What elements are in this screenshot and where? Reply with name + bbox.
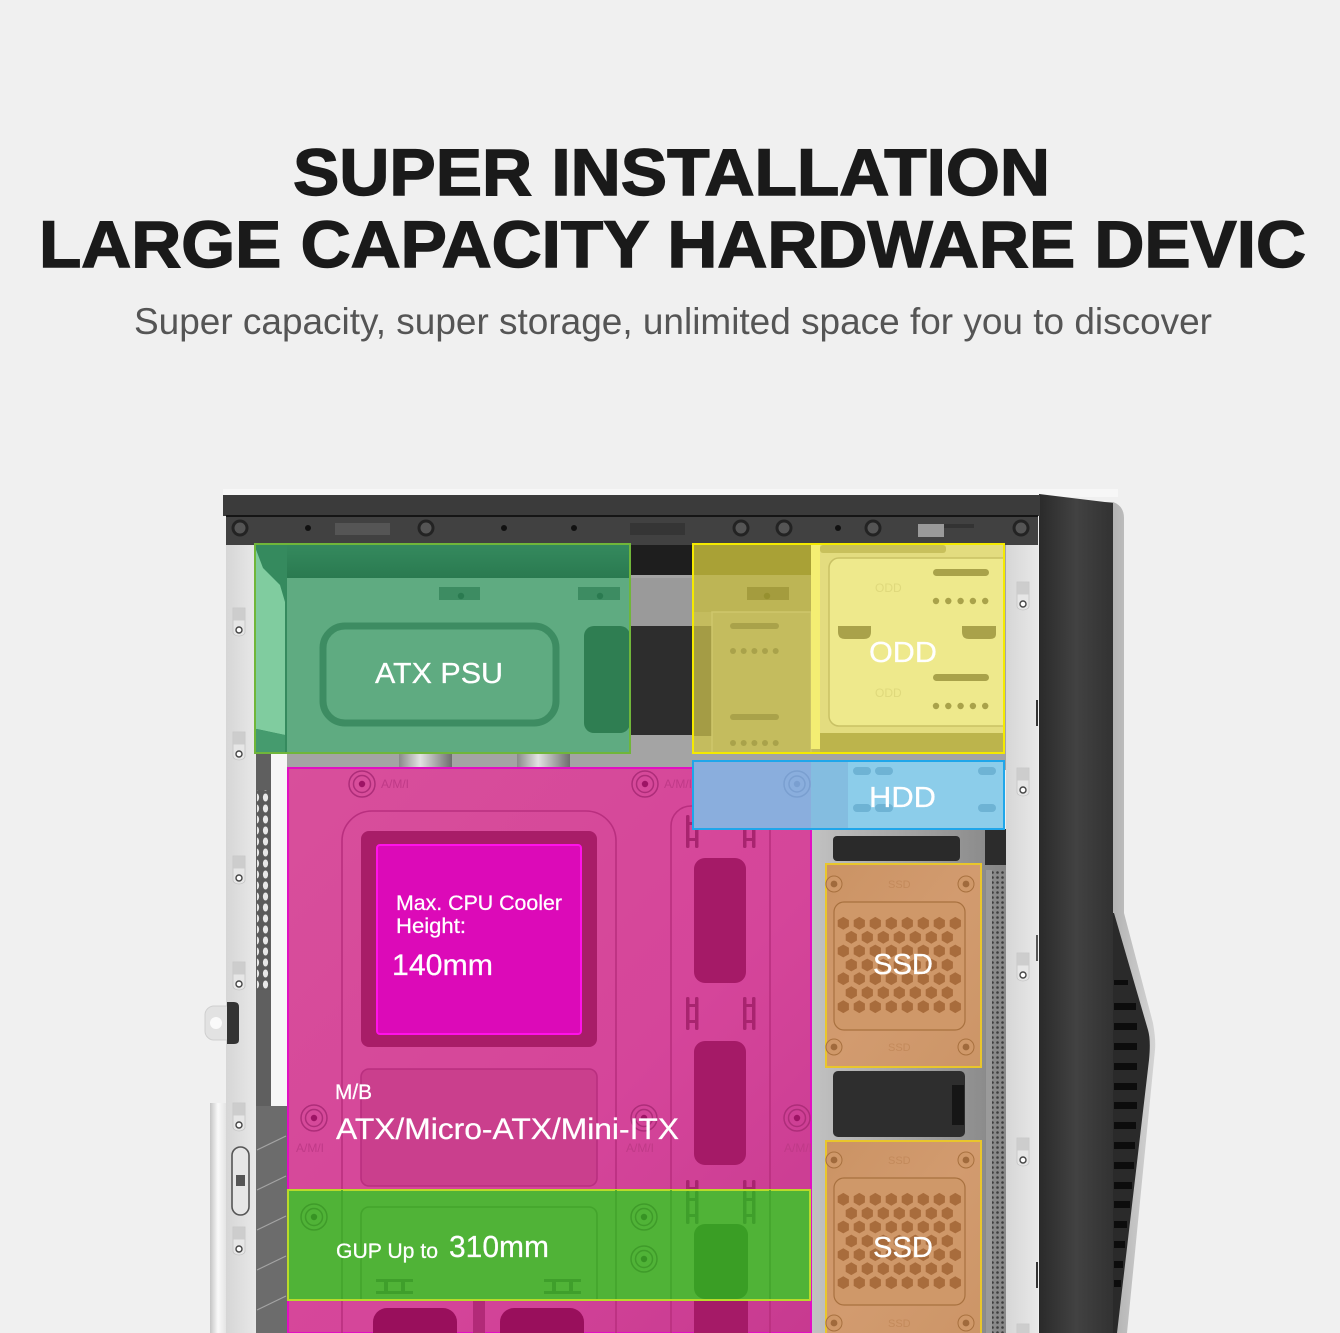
faint A/M/I marks: A/M/I xyxy=(626,1141,654,1155)
panel: GPU: GUP Up to xyxy=(336,1240,438,1263)
drive bay background xyxy=(811,829,1007,1333)
faint A/M/I marks: A/M/I xyxy=(381,777,409,791)
faint A/M/I marks: A/M/I xyxy=(664,777,692,791)
rear opening xyxy=(630,626,692,735)
motherboard label: ATX/Micro-ATX/Mini-ITX xyxy=(336,1113,679,1146)
front panel xyxy=(1039,494,1113,1333)
panel: SSD upper: SSD xyxy=(888,1042,911,1054)
motherboard relief lines xyxy=(342,806,770,1333)
motherboard label xyxy=(335,1081,679,1146)
faint A/M/I marks: A/M/I xyxy=(784,1141,812,1155)
title: LARGE CAPACITY HARDWARE DEVIC xyxy=(39,207,1306,281)
panel: SSD upper: SSD xyxy=(888,879,911,891)
case light halo xyxy=(223,489,1118,497)
panel: GPU: 310mm xyxy=(449,1229,549,1264)
front panel silver edge xyxy=(1100,502,1155,1333)
motherboard label: M/B xyxy=(335,1081,372,1104)
panel: GPU xyxy=(288,1190,810,1300)
interior back panel xyxy=(287,545,1007,770)
panel: SSD lower: SSD xyxy=(873,1232,933,1264)
panel: ODD xyxy=(693,544,1004,753)
panel: CPU cooler: 140mm xyxy=(392,949,493,982)
standoff cylinders xyxy=(399,753,570,768)
top rail with screws xyxy=(226,515,1038,545)
panel: SSD lower: SSD xyxy=(888,1318,911,1330)
panel: SSD upper: SSD xyxy=(873,949,933,981)
title xyxy=(39,135,1306,281)
rear perforated strip xyxy=(256,753,287,1333)
mounting bracket xyxy=(205,1002,239,1044)
motherboard slots xyxy=(373,858,748,1333)
panel: SSD lower: SSD xyxy=(888,1155,911,1167)
panel: ODD: ODD xyxy=(875,686,902,700)
panel: CPU cooler: Max. CPU Cooler xyxy=(396,892,562,915)
panel: ATX PSU xyxy=(255,544,630,753)
title: SUPER INSTALLATION xyxy=(293,135,1050,209)
left accent tube xyxy=(210,1103,226,1333)
faint A/M/I marks: A/M/I xyxy=(296,1141,324,1155)
panel: CPU cooler: Height: xyxy=(396,915,466,938)
panel: HDD xyxy=(693,761,1004,829)
subtitle: Super capacity, super storage, unlimited space for you to discover xyxy=(134,301,1212,342)
panel: SSD lower xyxy=(826,1141,981,1333)
faint A/M/I marks xyxy=(296,777,812,1155)
panel: SSD upper xyxy=(826,864,981,1067)
motherboard standoffs xyxy=(301,771,810,1131)
panel: CPU cooler xyxy=(361,831,597,1047)
panel: HDD: HDD xyxy=(869,782,936,814)
panel: ODD: ODD xyxy=(875,581,902,595)
PC case illustration xyxy=(205,489,1155,1333)
front side bulge xyxy=(1100,913,1150,1333)
motherboard H marks xyxy=(473,815,756,1333)
top cap xyxy=(223,495,1040,516)
left rail xyxy=(226,545,256,1333)
front vents xyxy=(1114,980,1137,1287)
interior top shadow xyxy=(630,545,692,575)
right rail xyxy=(1006,545,1038,1333)
panel: ATX PSU: ATX PSU xyxy=(375,658,503,690)
panel: motherboard xyxy=(288,768,812,1333)
panel: ODD: ODD xyxy=(869,637,937,669)
grey plate xyxy=(630,578,692,626)
